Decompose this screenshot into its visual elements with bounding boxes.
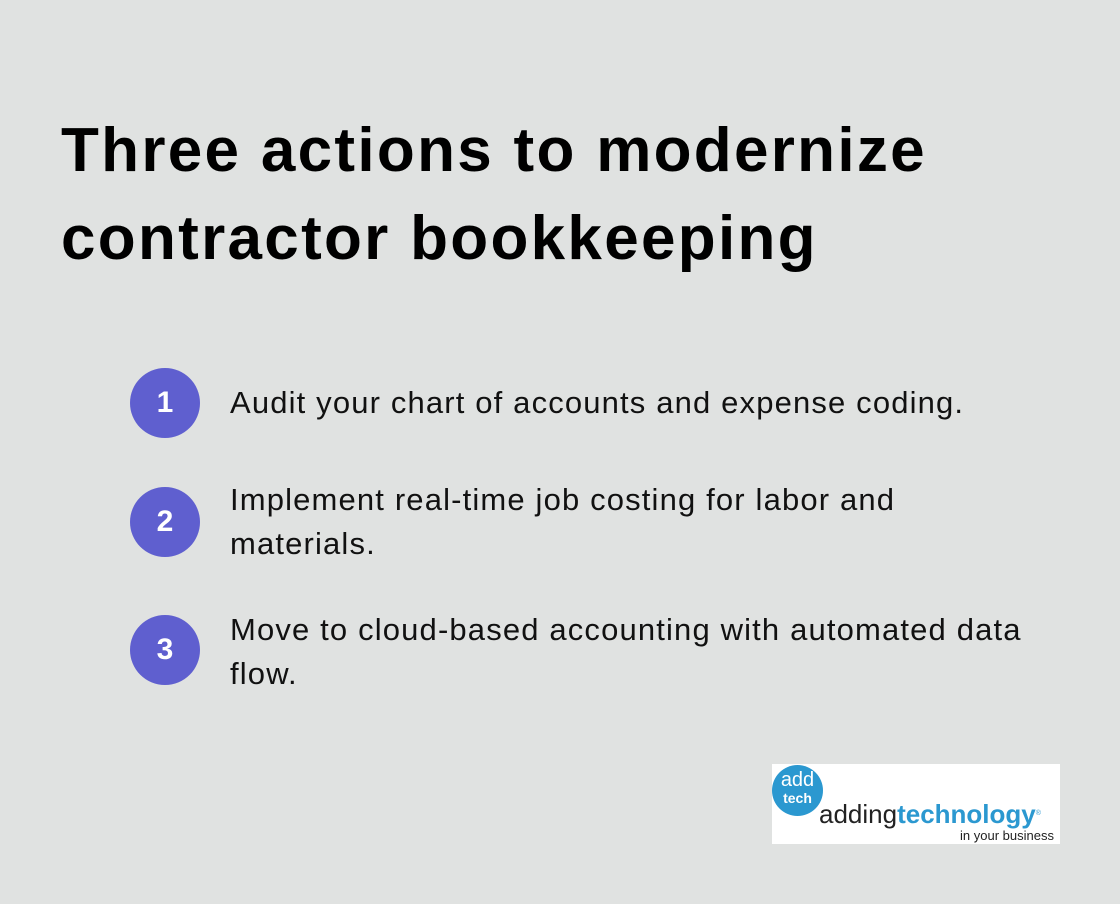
logo tagline: in your business xyxy=(960,828,1054,843)
text 1: Audit your chart of accounts and expense coding. xyxy=(230,385,964,420)
number 1 xyxy=(130,368,200,438)
item 3 xyxy=(130,612,1022,691)
number 2 xyxy=(130,487,200,557)
text 2 xyxy=(230,482,895,561)
logo circle: add xyxy=(781,769,814,791)
title: Three actions to modernize xyxy=(61,116,927,185)
number 2: 2 xyxy=(157,505,173,538)
title xyxy=(61,116,927,273)
logo xyxy=(772,764,1060,844)
text 3: flow. xyxy=(230,656,298,691)
logo circle xyxy=(772,765,823,816)
title: contractor bookkeeping xyxy=(61,204,818,273)
text 2: materials. xyxy=(230,526,376,561)
text 3 xyxy=(230,612,1022,691)
number 1: 1 xyxy=(157,386,173,419)
number 3 xyxy=(130,615,200,685)
number 3: 3 xyxy=(157,633,173,666)
logo circle: tech xyxy=(783,790,812,806)
logo wordmark: addingtechnology® xyxy=(819,799,1041,829)
text 3: Move to cloud-based accounting with automated data xyxy=(230,612,1022,647)
item 1 xyxy=(130,368,964,438)
text 2: Implement real-time job costing for labor and xyxy=(230,482,895,517)
item 2 xyxy=(130,482,895,561)
